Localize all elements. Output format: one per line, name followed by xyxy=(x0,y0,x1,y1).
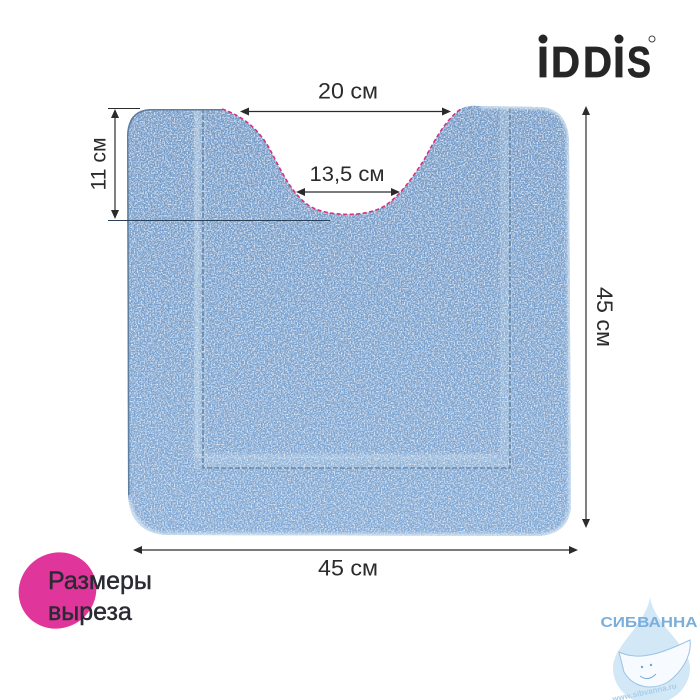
logo: IDDIS: D xyxy=(551,38,580,87)
callout: cutout dimensions: Размеры xyxy=(48,567,152,595)
callout: cutout dimensions: выреза xyxy=(48,598,132,626)
dimension: 20 cm: 20 см xyxy=(318,78,378,104)
dimension: 11 cm: 11 см xyxy=(88,138,110,190)
dimension: 45 cm height: 45 см xyxy=(592,287,617,347)
bath mat photo xyxy=(120,100,580,540)
logo: IDDIS: D xyxy=(583,38,612,87)
logo: IDDIS: S xyxy=(627,38,651,87)
dimension: 45 cm width: 45 см xyxy=(318,556,378,580)
logo: IDDIS: I xyxy=(537,38,549,87)
mat inner frame band xyxy=(197,108,510,468)
mat edge shading xyxy=(127,109,222,495)
callout: cutout dimensions xyxy=(4,537,152,644)
dimension: 13,5 cm xyxy=(296,163,400,196)
dimension: 20 cm xyxy=(240,78,451,116)
cutout dashed outline xyxy=(222,108,462,214)
logo: IDDIS xyxy=(537,34,655,87)
logo: IDDIS: I xyxy=(613,38,625,87)
dimension: 45 cm width xyxy=(133,546,578,580)
watermark: Sibvanna logo xyxy=(600,597,698,700)
watermark: Sibvanna logo: СИБВАННА xyxy=(600,615,698,631)
dimension: 45 cm height xyxy=(582,106,617,528)
dimension: 13,5 cm: 13,5 см xyxy=(310,163,384,186)
dimension: 11 cm xyxy=(88,108,330,220)
